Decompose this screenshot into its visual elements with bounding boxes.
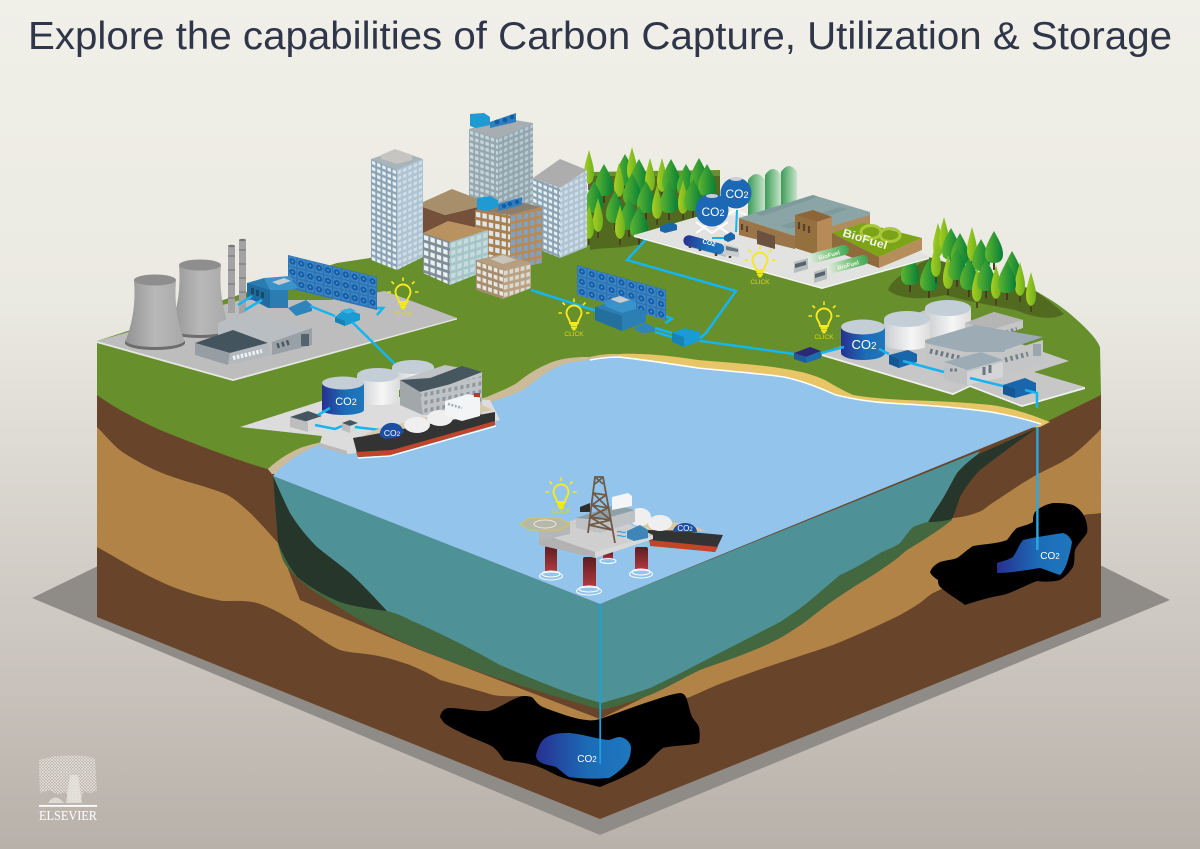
bulb click 5: [546, 478, 576, 515]
blue tank: CO2: [335, 396, 357, 408]
CO2 dome dock: [380, 423, 404, 439]
dark valve: [794, 347, 821, 363]
tower left: [371, 149, 423, 270]
CO2 sphere back: [720, 177, 752, 216]
lake surface: [273, 357, 1041, 604]
cooling tower front: [125, 274, 185, 350]
CO2 truck: CO2: [701, 238, 717, 248]
factory: [195, 312, 312, 365]
pipes central: [627, 220, 794, 354]
plaza: [97, 291, 457, 379]
CO2 sphere back: CO2: [725, 187, 749, 201]
derrick: [588, 477, 615, 543]
dock: [240, 360, 500, 458]
Elsevier logo: ELSEVIER: [39, 808, 97, 823]
white tank mid: [884, 311, 930, 350]
pipe to dock: [352, 322, 396, 365]
blue tank CO2: CO2: [851, 337, 877, 352]
tank 2: [357, 368, 399, 405]
white waterline: [590, 357, 1041, 424]
green roof building: [832, 223, 922, 268]
CO2 pocket left: [536, 733, 631, 779]
small tan building: [476, 254, 531, 299]
forest back shadow left: [590, 176, 720, 250]
bulb click 4: CLICK: [814, 334, 834, 341]
biofuel truck 2: [814, 254, 869, 283]
small sheds: [290, 411, 358, 433]
factory: [739, 195, 870, 255]
underground CO2 reservoir left: [440, 693, 700, 787]
biofuel truck 2: BioFuel: [837, 260, 860, 272]
biofuel site: [634, 166, 929, 289]
cooling tower back: [170, 260, 230, 338]
grass surface: [97, 170, 1101, 469]
bulb click 3: [744, 246, 776, 286]
bulb click 5: CLICK: [551, 508, 571, 515]
city: [371, 113, 587, 299]
pipe network power: [238, 296, 383, 316]
lake shore sand: [268, 354, 1050, 474]
CO2 pocket right: [997, 533, 1072, 575]
plaza: [822, 310, 1085, 405]
bulb click 4: [808, 302, 840, 341]
CO2 injection pipe rig: [599, 558, 601, 764]
capture fan wall: [288, 255, 377, 310]
coastal storage site: [794, 300, 1085, 408]
transfer block centre: [672, 328, 700, 347]
CO2 sphere front: [696, 194, 728, 233]
tower right: [533, 159, 587, 258]
CO2 dome rig: CO2: [677, 524, 693, 533]
pipe city to unit: [531, 290, 600, 312]
water cross-section: [273, 428, 1037, 710]
rig legs: [540, 546, 652, 595]
silos: [748, 166, 797, 220]
CO2 pocket right: CO2: [1040, 551, 1060, 562]
pipes dock: [315, 408, 380, 430]
warehouse: [400, 365, 482, 415]
forest shadow right: [888, 258, 1064, 318]
biofuel truck 1: BioFuel: [818, 250, 841, 262]
tree mark: [39, 755, 97, 807]
underground CO2 reservoir right: [930, 503, 1087, 605]
orange building: [475, 196, 542, 270]
beige shore left: [268, 354, 619, 474]
forest right: [901, 217, 1036, 312]
bulb click 2: CLICK: [564, 331, 584, 338]
CO2 truck: [682, 234, 739, 258]
green roof building: BioFuel: [841, 227, 889, 252]
transfer block: [335, 308, 360, 326]
main building: [925, 312, 1043, 385]
tower grey: [469, 113, 533, 230]
CO2 injection pipe right: [1036, 425, 1039, 550]
capture unit: [247, 276, 312, 316]
pipes coast: [821, 347, 1037, 408]
biofuel truck 1: [794, 244, 850, 273]
title: Explore the capabilities of Carbon Capture, Utilization & Storage: [28, 15, 1172, 58]
offshore rig: [520, 477, 723, 595]
central capture site: [531, 220, 794, 354]
valve boxes: [660, 210, 737, 242]
blue box 1: [889, 350, 917, 368]
rig deck: [539, 493, 653, 558]
tank 3: [392, 360, 434, 390]
teal building: [423, 221, 488, 285]
CO2 pocket left: CO2: [577, 754, 597, 765]
blue tank: [322, 376, 364, 415]
bulb click 1: CLICK: [393, 311, 413, 318]
terrain cross-section: [97, 392, 1101, 819]
dock plaza: [240, 395, 500, 454]
chimneys: [228, 239, 246, 314]
bulb click 1: [388, 278, 418, 318]
power plant site: [97, 239, 457, 381]
blue box 2: [1003, 378, 1036, 398]
CO2 sphere front: CO2: [701, 205, 725, 219]
bulb click 3: CLICK: [750, 279, 770, 286]
Elsevier logo: [39, 755, 97, 823]
block drop shadow: [32, 566, 1170, 835]
blue tank CO2: [841, 320, 885, 360]
fan wall centre: [577, 265, 666, 320]
bulb click 2: [558, 298, 590, 338]
ship offshore: [629, 508, 723, 552]
brown building back: [423, 189, 478, 250]
capture unit centre: [595, 296, 655, 333]
plaza: [634, 215, 929, 287]
ship dock: [353, 393, 496, 458]
CO2 dome dock: CO2: [384, 428, 401, 438]
white tank back: [925, 300, 971, 340]
helideck: [520, 518, 570, 530]
forest left: [584, 147, 716, 245]
